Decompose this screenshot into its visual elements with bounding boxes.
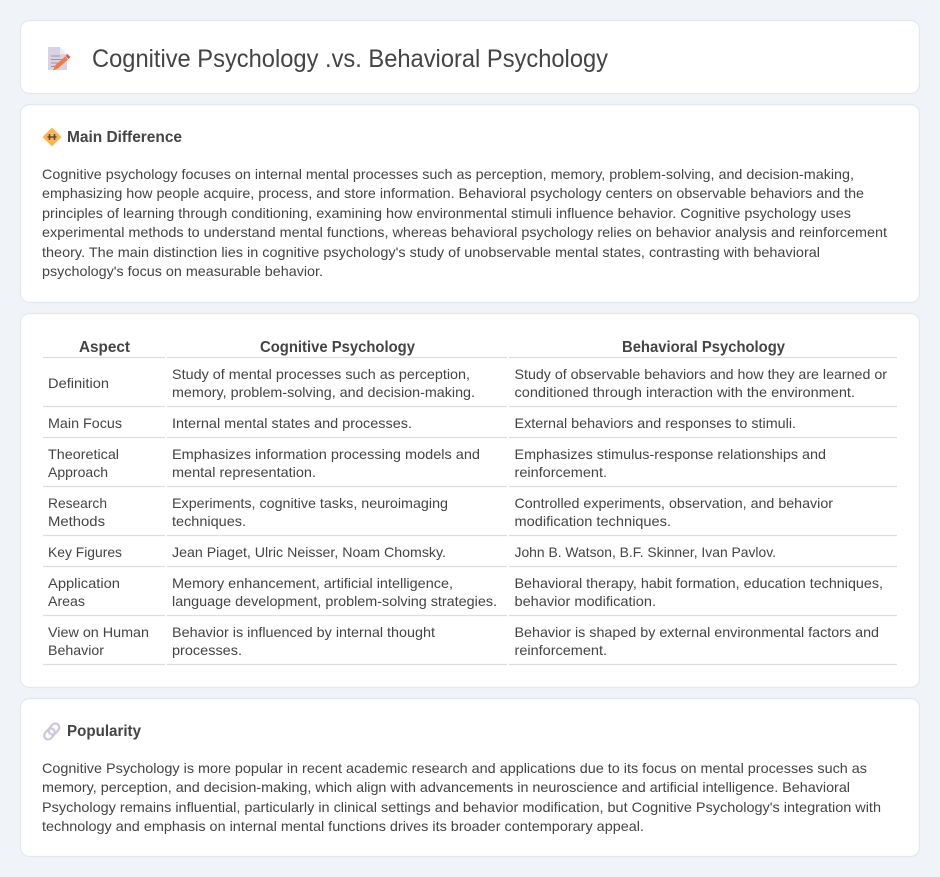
text block: main difference paragraph: principles of learning through conditioning, examining how environmental stimuli influence behavior. Cognitive psychology uses — [42, 205, 851, 221]
row: application areas: Areas — [48, 593, 85, 609]
row: view on human behavior: Behavior is shaped by external environmental factors and — [514, 624, 879, 640]
row: research methods: techniques. — [172, 513, 246, 529]
row: research methods: Controlled experiments, observation, and behavior — [514, 495, 833, 511]
row: theoretical approach: Emphasizes information processing models and — [172, 446, 480, 462]
table header: Cognitive Psychology — [260, 339, 415, 356]
text block: main difference paragraph — [42, 166, 887, 279]
text block: popularity paragraph: Cognitive Psychology is more popular in recent academic research and applications due to its focus on mental processes such as — [42, 760, 867, 776]
row: definition: Definition — [48, 375, 109, 391]
panel: popularity — [20, 698, 920, 856]
row: application areas: Behavioral therapy, habit formation, education techniques, — [514, 575, 883, 591]
row: research methods: Experiments, cognitive tasks, neuroimaging — [172, 495, 448, 511]
row: main focus: Internal mental states and processes. — [172, 415, 412, 431]
table header — [79, 339, 785, 356]
row: key figures: John B. Watson, B.F. Skinner, Ivan Pavlov. — [514, 544, 776, 560]
panel: comparison table — [20, 314, 920, 688]
row: view on human behavior: Behavior — [48, 642, 104, 658]
row: theoretical approach: Emphasizes stimulus-response relationships and — [514, 446, 826, 462]
row: research methods: Research — [48, 495, 107, 511]
text block: main difference paragraph: theory. The main distinction lies in cognitive psychology's study of unobservable mental states, contrasting with behavioral — [42, 244, 820, 260]
row: definition: Study of observable behaviors and how they are learned or — [514, 366, 887, 382]
row: theoretical approach: reinforcement. — [514, 464, 607, 480]
title: Cognitive Psychology .vs. Behavioral Psychology — [92, 45, 608, 73]
text block: main difference paragraph: Cognitive psychology focuses on internal mental processes such as perception, memory, problem-solving, and decision-making, — [42, 166, 854, 182]
icon: orange diamond — [44, 128, 60, 146]
text block: popularity paragraph: memory, perception, and decision-making, which align with advancements in neuroscience and artificial intelligence. Behavioral — [42, 779, 850, 795]
text block: main difference paragraph: psychology's focus on measurable behavior. — [42, 263, 323, 279]
row: view on human behavior: View on Human — [48, 624, 149, 640]
row: application areas: behavior modification. — [514, 593, 656, 609]
row: view on human behavior: processes. — [172, 642, 242, 658]
row: view on human behavior: Behavior is influenced by internal thought — [172, 624, 435, 640]
row: theoretical approach: Theoretical — [48, 446, 119, 462]
row: view on human behavior: reinforcement. — [514, 642, 607, 658]
row: application areas — [48, 575, 883, 609]
text block: main difference paragraph: experimental methods to understand mental functions, whereas behavioral psychology relies on behavior analysis and reinforcement — [42, 224, 887, 240]
heading: main difference: Main Difference — [67, 129, 182, 146]
row: main focus — [48, 415, 796, 431]
row: key figures — [48, 544, 776, 560]
row: research methods — [48, 495, 833, 529]
row: key figures: Jean Piaget, Ulric Neisser, Noam Chomsky. — [172, 544, 446, 560]
row: application areas: language development, problem-solving strategies. — [172, 593, 497, 609]
table header: Aspect — [79, 339, 131, 356]
panel: title card — [20, 20, 920, 94]
row: theoretical approach: mental representation. — [172, 464, 316, 480]
row: theoretical approach — [48, 446, 826, 480]
icon: memo with pencil — [48, 47, 70, 70]
text block: main difference paragraph: emphasizing how people acquire, process, and store information. Behavioral psychology centers on observable behaviors and the — [42, 185, 864, 201]
icon: link — [43, 722, 61, 741]
row: application areas: Application — [48, 575, 120, 591]
row: definition: memory, problem-solving, and decision-making. — [172, 384, 475, 400]
text block: popularity paragraph — [42, 760, 881, 834]
row: main focus: Main Focus — [48, 415, 122, 431]
table header: Behavioral Psychology — [622, 339, 785, 356]
row: definition: conditioned through interaction with the environment. — [514, 384, 855, 400]
row: research methods: modification techniques. — [514, 513, 671, 529]
row: definition — [48, 366, 887, 400]
row: theoretical approach: Approach — [48, 464, 108, 480]
row: application areas: Memory enhancement, artificial intelligence, — [172, 575, 453, 591]
row: definition: Study of mental processes such as perception, — [172, 366, 470, 382]
row: view on human behavior — [48, 624, 879, 658]
text block: popularity paragraph: technology and emphasis on internal mental functions drives its broader contemporary appeal. — [42, 818, 644, 834]
heading: popularity: Popularity — [67, 723, 141, 740]
row: research methods: Methods — [48, 513, 105, 529]
panel: main difference — [20, 104, 920, 302]
text block: popularity paragraph: Psychology remains influential, particularly in clinical settings and behavior modification, but Cognitive Psychology's integration with — [42, 799, 881, 815]
row: key figures: Key Figures — [48, 544, 122, 560]
row: main focus: External behaviors and responses to stimuli. — [514, 415, 796, 431]
